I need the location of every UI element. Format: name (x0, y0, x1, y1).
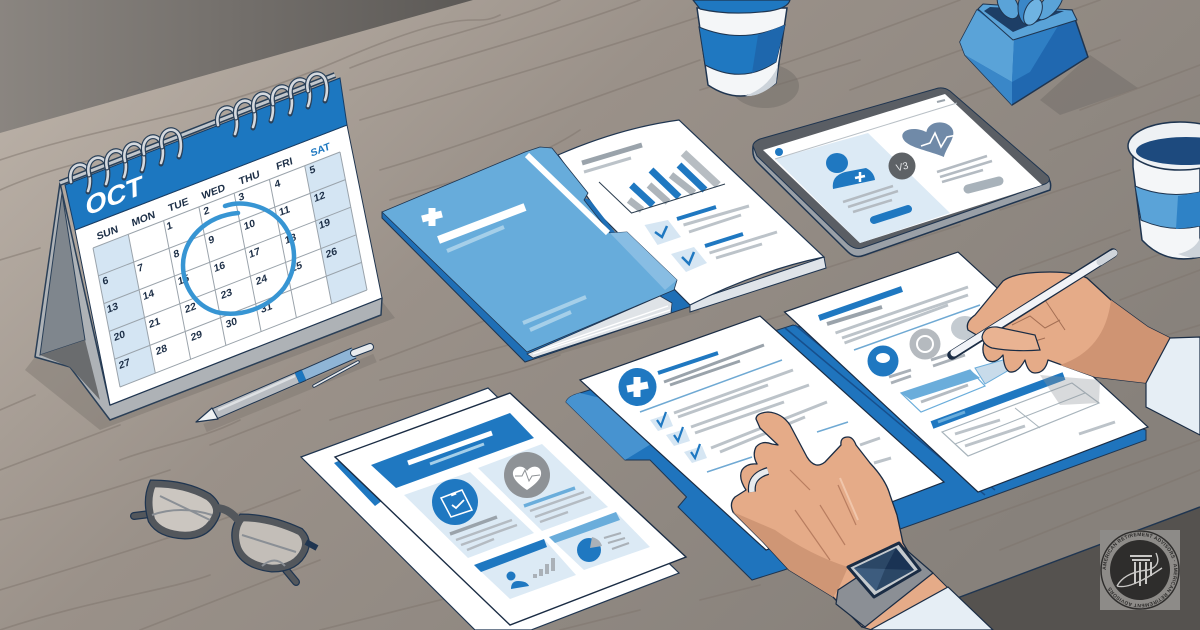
date numbers: 26 (325, 246, 338, 261)
front sheet (335, 393, 686, 625)
calendar stand (35, 183, 382, 420)
logo column icon (1117, 553, 1162, 587)
wrist (862, 573, 950, 630)
logo text: AMERICAN RETIREMENT ADVISORS · AMERICAN RETIREMENT ADVISORS (1102, 532, 1178, 608)
date numbers: 12 (313, 190, 326, 205)
shirt cuff (1146, 337, 1200, 435)
date numbers: 16 (213, 260, 226, 275)
gray circle icon (910, 328, 940, 360)
date numbers: 19 (318, 217, 331, 232)
tablet screen (763, 94, 1042, 243)
folder cover (382, 147, 677, 352)
month label: OCT (85, 170, 143, 222)
medical cross badge (618, 368, 656, 406)
plant leaves (993, 0, 1068, 28)
date numbers: 8 (173, 248, 181, 261)
date numbers: 10 (243, 218, 256, 233)
report heading lines (582, 145, 642, 163)
weekday labels: WED (201, 183, 227, 202)
form: right page (784, 252, 1148, 492)
form table (932, 375, 1100, 456)
pamphlet stack (301, 388, 686, 630)
v3 badge: V3 (895, 161, 910, 174)
folder back (382, 212, 692, 362)
date numbers (102, 164, 338, 372)
coffee cup: top (693, 0, 799, 108)
weekday labels: THU (238, 169, 261, 188)
weekday labels: MON (131, 210, 156, 229)
date numbers: 25 (290, 260, 303, 275)
date numbers: 23 (220, 287, 233, 302)
date numbers: 14 (142, 288, 155, 303)
eyeglasses (134, 484, 317, 582)
panel: person stats (474, 539, 576, 599)
logo badge (1100, 530, 1180, 610)
blue folder with report (382, 120, 826, 362)
stylus (952, 253, 1114, 355)
form: left page (580, 316, 944, 550)
report page (558, 120, 824, 305)
date numbers: 28 (155, 343, 168, 358)
panel: clipboard (404, 472, 534, 558)
weekday labels (96, 141, 332, 243)
date numbers: 27 (118, 357, 131, 372)
hand-drawn circle (183, 204, 294, 314)
bar chart (599, 153, 725, 213)
potted plant (960, 0, 1138, 115)
weekday labels: TUE (168, 196, 190, 215)
weekday labels: SAT (310, 141, 332, 160)
heart icon (898, 120, 968, 163)
date numbers: 29 (190, 329, 203, 344)
date numbers: 18 (284, 232, 297, 247)
date numbers: 11 (278, 204, 291, 219)
left hand with watch (731, 412, 993, 630)
weekday labels: SUN (96, 224, 119, 243)
date numbers: 2 (203, 205, 211, 218)
panel: heart (478, 444, 608, 531)
thumb (982, 327, 1040, 351)
date numbers: 15 (177, 273, 190, 288)
form checkmarks (650, 412, 707, 463)
ring (752, 471, 768, 492)
blue form folder (566, 325, 1146, 580)
panel: pie chart (549, 512, 650, 570)
date numbers: 9 (208, 234, 216, 247)
wire bar (60, 75, 335, 183)
date numbers: 22 (184, 301, 197, 316)
calendar page (75, 125, 382, 405)
back sheet (301, 388, 679, 630)
date numbers: 30 (225, 316, 238, 331)
date numbers: 24 (255, 273, 268, 288)
calendar (25, 74, 395, 430)
date numbers: 17 (248, 246, 261, 261)
spiral rings (70, 74, 327, 192)
date numbers: 6 (102, 275, 110, 288)
checklist (644, 220, 681, 245)
form box (901, 370, 985, 412)
date numbers: 7 (137, 262, 145, 275)
v3 badge (888, 152, 916, 180)
medical cross icon (422, 208, 442, 226)
weekend cells (93, 234, 155, 387)
calendar header (65, 78, 347, 230)
date numbers: 3 (238, 191, 246, 204)
folder gap (582, 197, 618, 236)
watch (836, 543, 933, 627)
date numbers: 13 (106, 301, 119, 316)
shirt sleeve (870, 587, 993, 630)
right hand with stylus (952, 253, 1200, 435)
date numbers: 31 (260, 301, 273, 316)
pamphlet header (371, 413, 534, 488)
calendar grid (93, 152, 367, 387)
date numbers: 5 (309, 164, 317, 177)
patient icon (826, 153, 875, 189)
blue circle icon (868, 346, 898, 376)
date numbers: 4 (274, 178, 282, 191)
under pages (527, 296, 672, 358)
weekday labels: FRI (276, 156, 294, 173)
date numbers: 20 (113, 329, 126, 344)
date numbers: 1 (166, 220, 174, 233)
pen (196, 347, 375, 428)
tablet (753, 88, 1051, 256)
date numbers: 21 (148, 316, 161, 331)
coffee cup: right (1128, 122, 1200, 259)
